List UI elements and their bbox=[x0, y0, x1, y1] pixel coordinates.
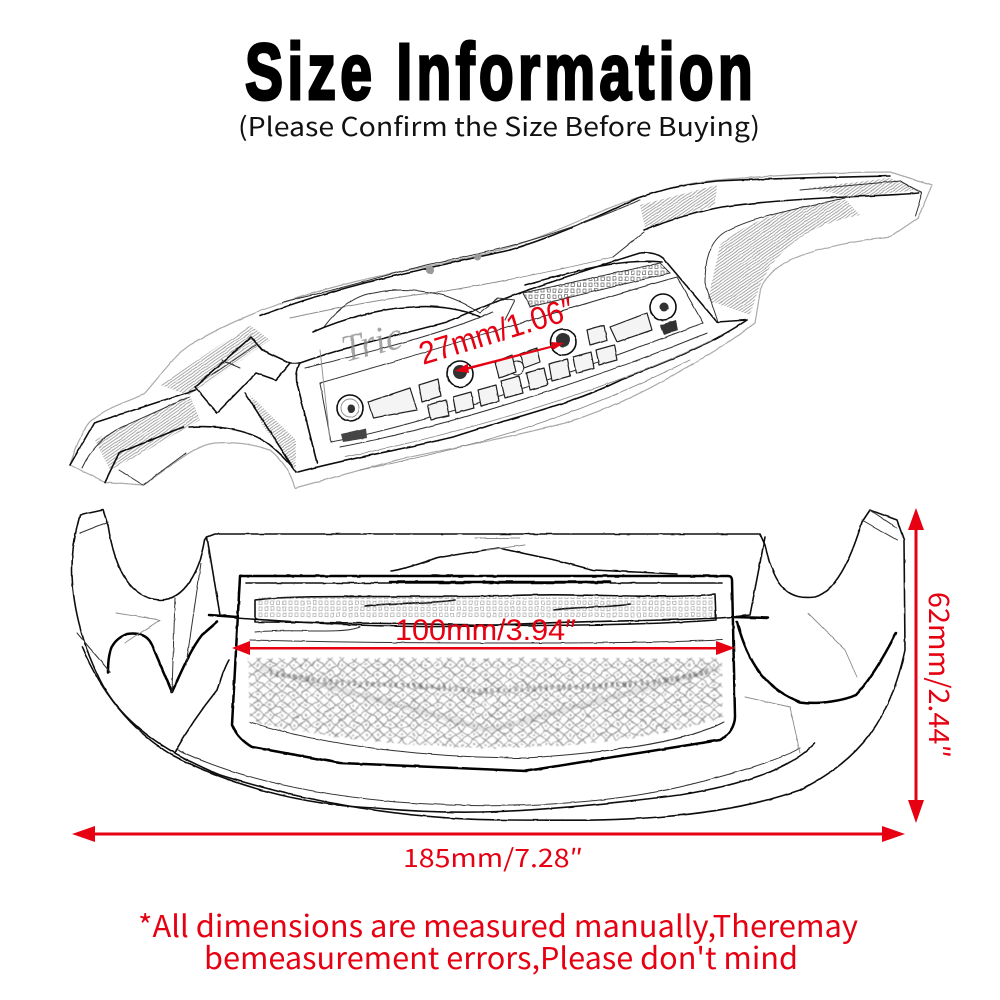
dimension: 100mm/3.94" bbox=[232, 614, 735, 655]
footnote: *All dimensions are measured manually,Theremay bbox=[138, 902, 858, 946]
arrow: 62mm height bbox=[908, 508, 924, 823]
lens frame bbox=[232, 576, 735, 771]
label: 62mm: 62mm/2.44″ bbox=[920, 592, 960, 758]
label: 185mm: 185mm/7.28″ bbox=[403, 839, 583, 875]
footnote bbox=[138, 902, 858, 978]
title: Size Information bbox=[245, 27, 757, 116]
lens texture bbox=[248, 658, 722, 748]
wires and connector bbox=[195, 290, 515, 413]
dimension: 27mm/1.06" bbox=[415, 290, 578, 373]
footnote: bemeasurement errors,Please don't mind bbox=[204, 934, 798, 978]
subtitle: (Please Confirm the Size Before Buying) bbox=[238, 107, 760, 144]
dimension: 185mm/7.28" bbox=[72, 826, 905, 875]
label: 100mm: 100mm/3.94″ bbox=[395, 614, 576, 647]
wing and inner contours bbox=[77, 510, 897, 812]
illustration: fender back view, line sketch bbox=[70, 172, 932, 488]
label: 27mm: 27mm/1.06″ bbox=[415, 290, 578, 372]
illustration: fender front view with lens, line sketch bbox=[72, 510, 905, 820]
watermark: Tric bbox=[337, 315, 407, 371]
mounting screws bbox=[337, 294, 676, 421]
arrow: 185mm width bbox=[72, 826, 905, 842]
outer silhouette bbox=[72, 510, 905, 820]
shading on the fender body bbox=[95, 178, 920, 470]
body contour lines bbox=[70, 176, 922, 485]
dimension: 62mm/2.44" bbox=[908, 508, 960, 823]
outer silhouette bbox=[70, 172, 932, 488]
arrow: 100mm span bbox=[232, 641, 735, 655]
switch blocks on the housing bbox=[320, 313, 678, 442]
recessed lamp housing bbox=[290, 253, 747, 472]
arrow: 27mm span bbox=[455, 342, 564, 373]
